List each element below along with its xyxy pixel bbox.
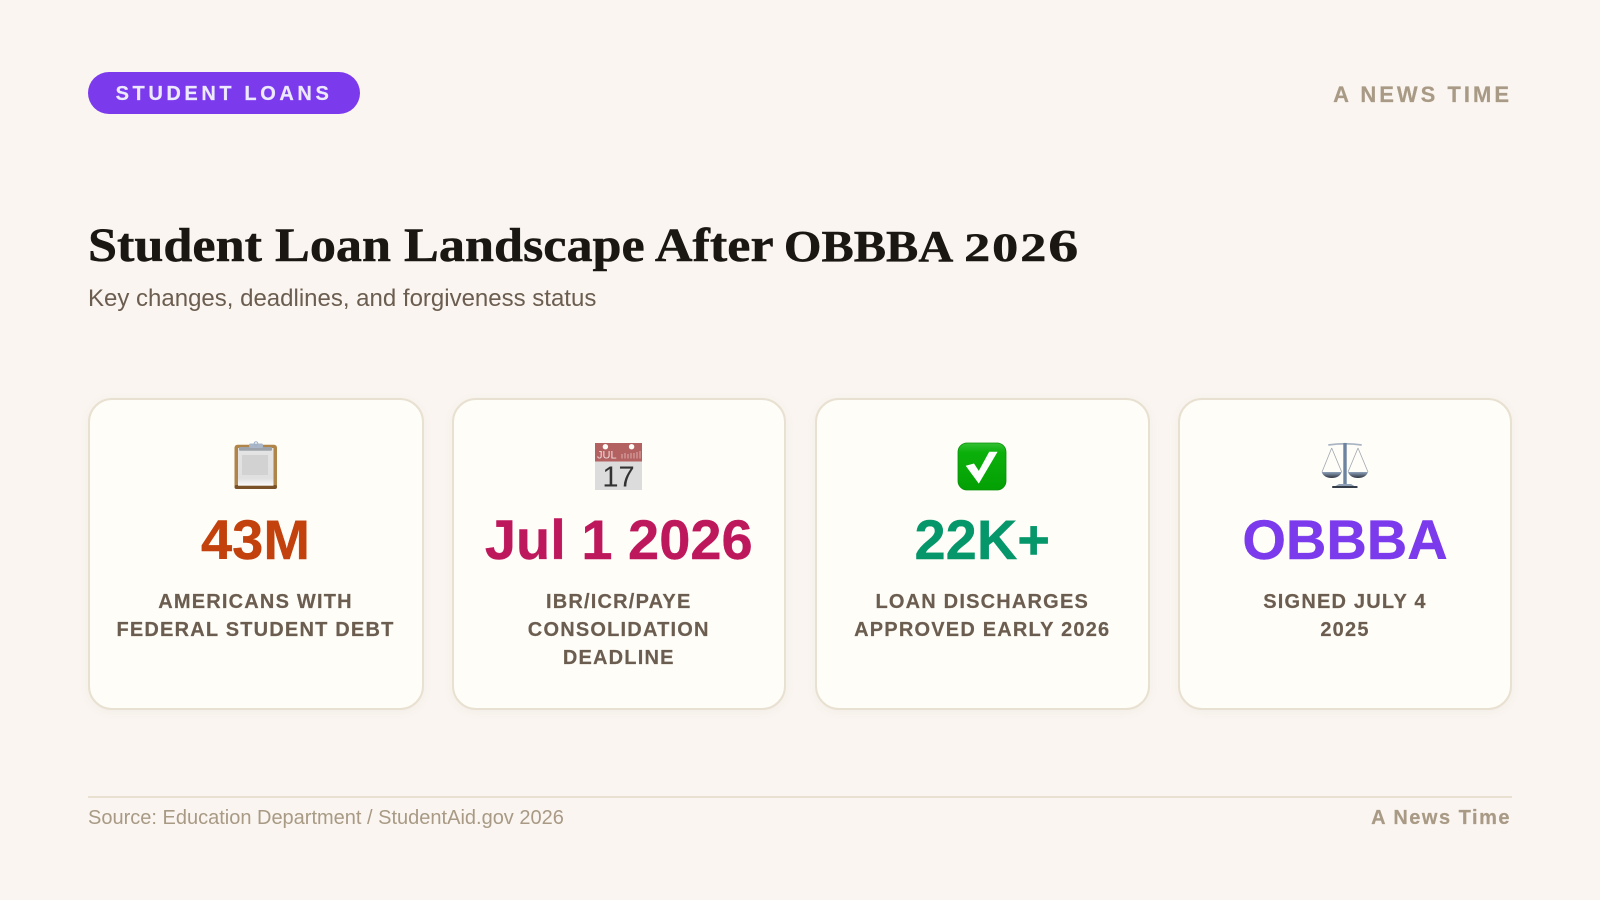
stat value: 22K+ [915, 508, 1050, 571]
source note: Source: Education Department / StudentAid.gov 2026 [88, 807, 564, 829]
icon: calendar: 17 [602, 462, 634, 494]
stat label: LOAN DISCHARGES [875, 591, 1089, 613]
stat label: APPROVED EARLY 2026 [854, 619, 1110, 641]
icon: check mark [958, 442, 1006, 490]
stat label: FEDERAL STUDENT DEBT [116, 619, 395, 641]
panel: 43M card [88, 398, 424, 710]
icon: balance scale [1322, 442, 1368, 488]
title: Student Loan Landscape After OBBBA [88, 219, 953, 272]
tag pill: STUDENT LOANS [116, 83, 332, 105]
stat label: DEADLINE [563, 647, 675, 669]
stat value: 43M [201, 508, 310, 571]
brand top right: A NEWS TIME [1333, 82, 1512, 107]
stat label: AMERICANS WITH [158, 591, 353, 613]
title: 2026 [964, 220, 1078, 271]
icon: calendar: JUL [597, 450, 616, 462]
stat value: Jul 1 2026 [485, 508, 753, 571]
tag pill [88, 72, 360, 114]
stat label: SIGNED JULY 4 [1263, 591, 1427, 613]
icon: calendar [595, 443, 642, 494]
panel: Jul 1 2026 card [452, 398, 786, 710]
footer brand: A News Time [1371, 807, 1511, 829]
stat label: 2025 [1320, 619, 1370, 641]
stat label: IBR/ICR/PAYE [546, 591, 692, 613]
panel: OBBBA card [1178, 398, 1512, 710]
stat label: CONSOLIDATION [528, 619, 710, 641]
panel: 22K+ card [814, 398, 1150, 710]
icon: clipboard [234, 441, 277, 489]
stat label [528, 591, 710, 669]
stat value: OBBBA [1242, 508, 1448, 571]
stat label [116, 591, 395, 641]
stat label [1263, 591, 1427, 641]
stat label [854, 591, 1110, 641]
subtitle: Key changes, deadlines, and forgiveness status [88, 285, 596, 312]
